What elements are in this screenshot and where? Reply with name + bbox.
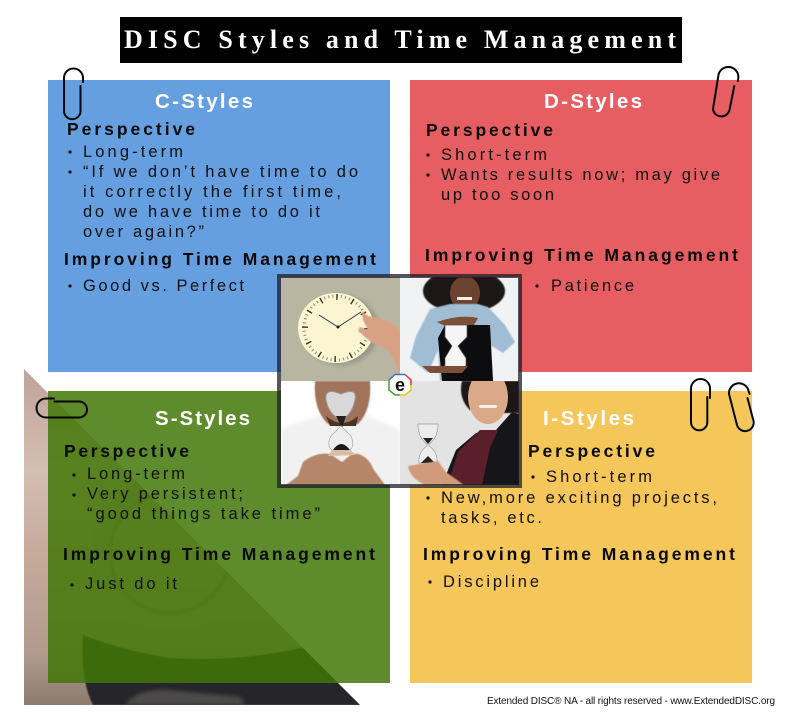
photo: man with hourglass — [281, 381, 400, 485]
icon: Extended DISC logo — [389, 374, 411, 395]
perspective list: Short-term — [546, 468, 652, 486]
perspective list: up too soon — [441, 186, 554, 204]
heading: Perspective: Perspective — [528, 441, 655, 461]
photo: girl with hourglass — [400, 269, 519, 381]
heading: S-Styles: S-Styles — [155, 407, 250, 430]
panel: I-Styles — [410, 391, 752, 683]
heading: D-Styles: D-Styles — [544, 90, 642, 113]
perspective list: Wants results now; may give — [441, 166, 720, 184]
heading: I-Styles: I-Styles — [543, 407, 634, 430]
title banner — [120, 17, 682, 63]
panel: S-Styles — [48, 391, 390, 683]
perspective list: it correctly the first time, — [83, 183, 341, 201]
panel: D-Styles — [410, 80, 752, 372]
icon: paperclip 1 on I panel — [691, 379, 710, 430]
perspective list — [72, 465, 320, 523]
photo: clock and hand — [281, 277, 400, 381]
perspective list: Short-term — [441, 146, 547, 164]
heading: Improving Time Management: Improving Time Management — [64, 249, 376, 269]
perspective list — [68, 143, 358, 241]
heading: Perspective: Perspective — [64, 441, 189, 461]
heading: C-Styles: C-Styles — [155, 90, 253, 113]
perspective list: “good things take time” — [87, 505, 320, 523]
collage frame — [279, 276, 520, 486]
perspective list: Long-term — [87, 465, 185, 483]
improving list: Discipline — [443, 573, 539, 591]
title text: DISC Styles and Time Management — [124, 25, 676, 54]
photo: woman with hourglass — [400, 370, 519, 485]
heading: Improving Time Management: Improving Time Management — [423, 544, 735, 564]
panel: C-Styles — [48, 80, 390, 372]
perspective list: over again?” — [83, 223, 204, 241]
heading: Perspective: Perspective — [67, 119, 195, 139]
icon: paperclip 2 on I panel — [729, 383, 754, 431]
improving list: Patience — [551, 277, 634, 295]
improving list: Just do it — [85, 575, 177, 593]
heading: Improving Time Management: Improving Time Management — [425, 245, 738, 265]
perspective list: Very persistent; — [87, 485, 243, 503]
perspective list: tasks, etc. — [441, 509, 542, 527]
perspective list: “If we don’t have time to do — [83, 163, 358, 181]
background photo triangle: watch — [24, 369, 370, 705]
perspective list — [426, 468, 717, 527]
icon: paperclip on C panel — [64, 68, 83, 119]
improving list: Good vs. Perfect — [83, 277, 244, 295]
icon: paperclip on S panel — [36, 398, 87, 418]
icon: Extended DISC logo: e — [395, 375, 405, 395]
photo collage — [279, 269, 520, 486]
heading: Improving Time Management: Improving Time Management — [63, 544, 375, 564]
perspective list: Long-term — [83, 143, 183, 161]
perspective list: New,more exciting projects, — [441, 489, 717, 507]
perspective list: do we have time to do it — [83, 203, 320, 221]
footer credit: Extended DISC® NA - all rights reserved - www.ExtendedDISC.org — [487, 696, 775, 707]
heading: Perspective: Perspective — [426, 120, 553, 140]
perspective list — [426, 146, 720, 204]
icon: paperclip on D panel — [713, 67, 738, 116]
